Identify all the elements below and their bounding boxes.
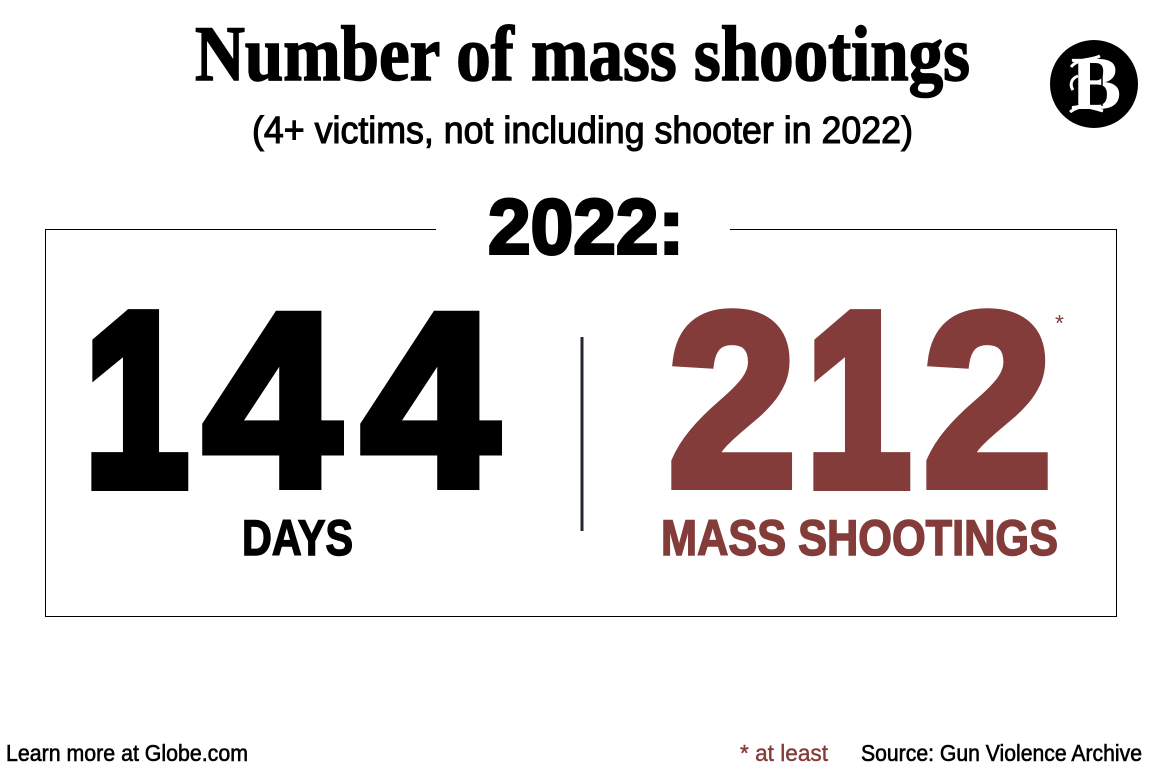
label: mass shootings: MASS SHOOTINGS [661,510,1058,566]
panel: 2022 statistics frame [46,182,1116,616]
statistic: 144 days [85,263,498,566]
footer: learn more: Learn more at Globe.com [6,740,248,766]
asterisk: * [1055,310,1064,336]
footer: source: Source: Gun Violence Archive [861,740,1142,766]
number: 144: 4 [204,263,340,538]
number: 212: 2 [923,262,1052,537]
icon: Boston Globe logo [1050,40,1138,128]
number: 144: 1 [85,263,188,536]
heading: 2022: 2022: [488,182,684,270]
number: 212: 1 [807,263,910,536]
divider [580,337,584,531]
footer: at least note: * at least [740,740,829,766]
label: days: DAYS [242,510,353,566]
number: 144: 4 [362,263,498,538]
subtitle: (4+ victims, not including shooter in 2022) [252,110,913,152]
number: 212: 2 [668,262,797,538]
title: Number of mass shootings [195,10,970,97]
number: 144 [85,263,498,538]
number: 212 [668,262,1052,538]
statistic: 212 mass shootings [661,262,1064,566]
icon: Boston Globe logo: B [1071,42,1121,126]
